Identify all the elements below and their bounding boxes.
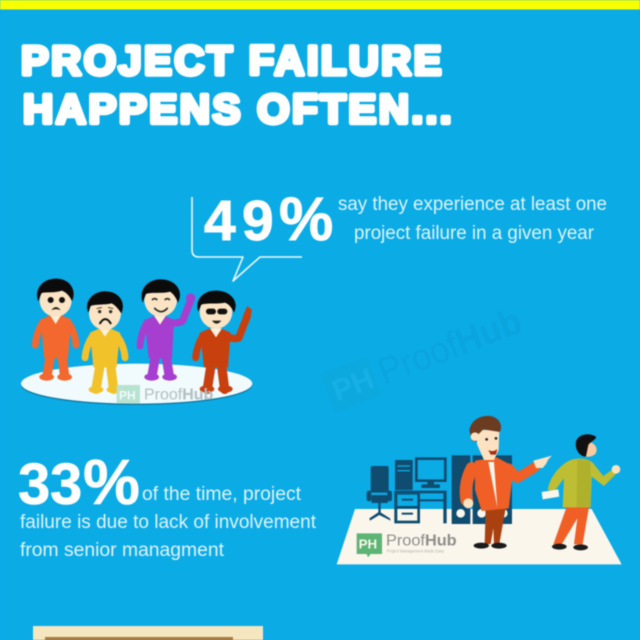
49% description: project failure in a given year: [354, 223, 595, 244]
computer tower: [395, 460, 413, 490]
legs: [553, 505, 589, 544]
watermark on disc: ProofHub: [144, 386, 213, 403]
bottom frame cropped at edge: [33, 626, 263, 640]
carpet: [337, 509, 622, 564]
ProofHub logo on carpet: Project Management Made Easy: [387, 549, 445, 554]
person: red, sunglasses, waving: [196, 291, 252, 393]
33% figure: 3: [50, 452, 82, 517]
office furniture: [367, 455, 512, 524]
torso: [475, 457, 514, 511]
desk with drawers: [394, 491, 447, 523]
title: [21, 38, 454, 132]
stat block: 49 percent: [192, 185, 607, 281]
title: PROJECT FAILURE: [21, 38, 444, 84]
person: yellow, sad: [85, 291, 125, 393]
top yellow bar: [0, 0, 640, 10]
man walking away with paper: [542, 434, 620, 550]
tie: [488, 462, 497, 507]
person: purple, waving: [140, 279, 195, 381]
watermark: central ProofHub logo: PH: [328, 363, 379, 408]
33% figure: 3: [18, 452, 50, 517]
pointing hand: [533, 456, 552, 468]
shoes: [552, 544, 588, 550]
paper: [542, 489, 559, 499]
33% description: [20, 484, 317, 561]
head: [582, 441, 597, 457]
watermark on disc: [117, 385, 213, 403]
49% figure: 9: [242, 189, 274, 253]
33% description: of the time, project: [142, 484, 302, 505]
49% figure: %: [279, 185, 333, 253]
49% description: [338, 194, 607, 244]
man pointing: [463, 416, 552, 549]
monitor: [415, 457, 447, 488]
filing cabinets: [452, 455, 512, 524]
torso and arms: [548, 459, 617, 507]
33% description: failure is due to lack of involvement: [20, 512, 317, 533]
title: HAPPENS OFTEN...: [23, 86, 454, 132]
watermark: central ProofHub logo: [320, 300, 527, 413]
shoes: [474, 543, 507, 549]
head: [474, 430, 499, 460]
49% description: say they experience at least one: [338, 194, 607, 215]
disc: [21, 364, 252, 405]
watermark: central ProofHub logo: ProofHub: [372, 300, 527, 392]
ProofHub logo on carpet: [357, 533, 457, 557]
arms: [466, 467, 535, 500]
illustration: office scene: [337, 416, 622, 564]
33% figure: %: [83, 446, 140, 518]
speech bubble outline: [192, 197, 302, 281]
person: orange, stern: [35, 279, 76, 381]
legs: [485, 508, 506, 544]
49% figure: 4: [204, 189, 236, 253]
stat block: 33 percent: [18, 446, 317, 561]
illustration: four people on a white disc: [21, 279, 252, 405]
hand: [612, 465, 620, 474]
ProofHub logo on carpet: PH: [359, 537, 377, 552]
ProofHub logo on carpet: ProofHub: [386, 533, 457, 550]
chair: [367, 466, 392, 521]
33% description: from senior managment: [20, 540, 225, 561]
watermark on disc: PH: [119, 388, 136, 402]
